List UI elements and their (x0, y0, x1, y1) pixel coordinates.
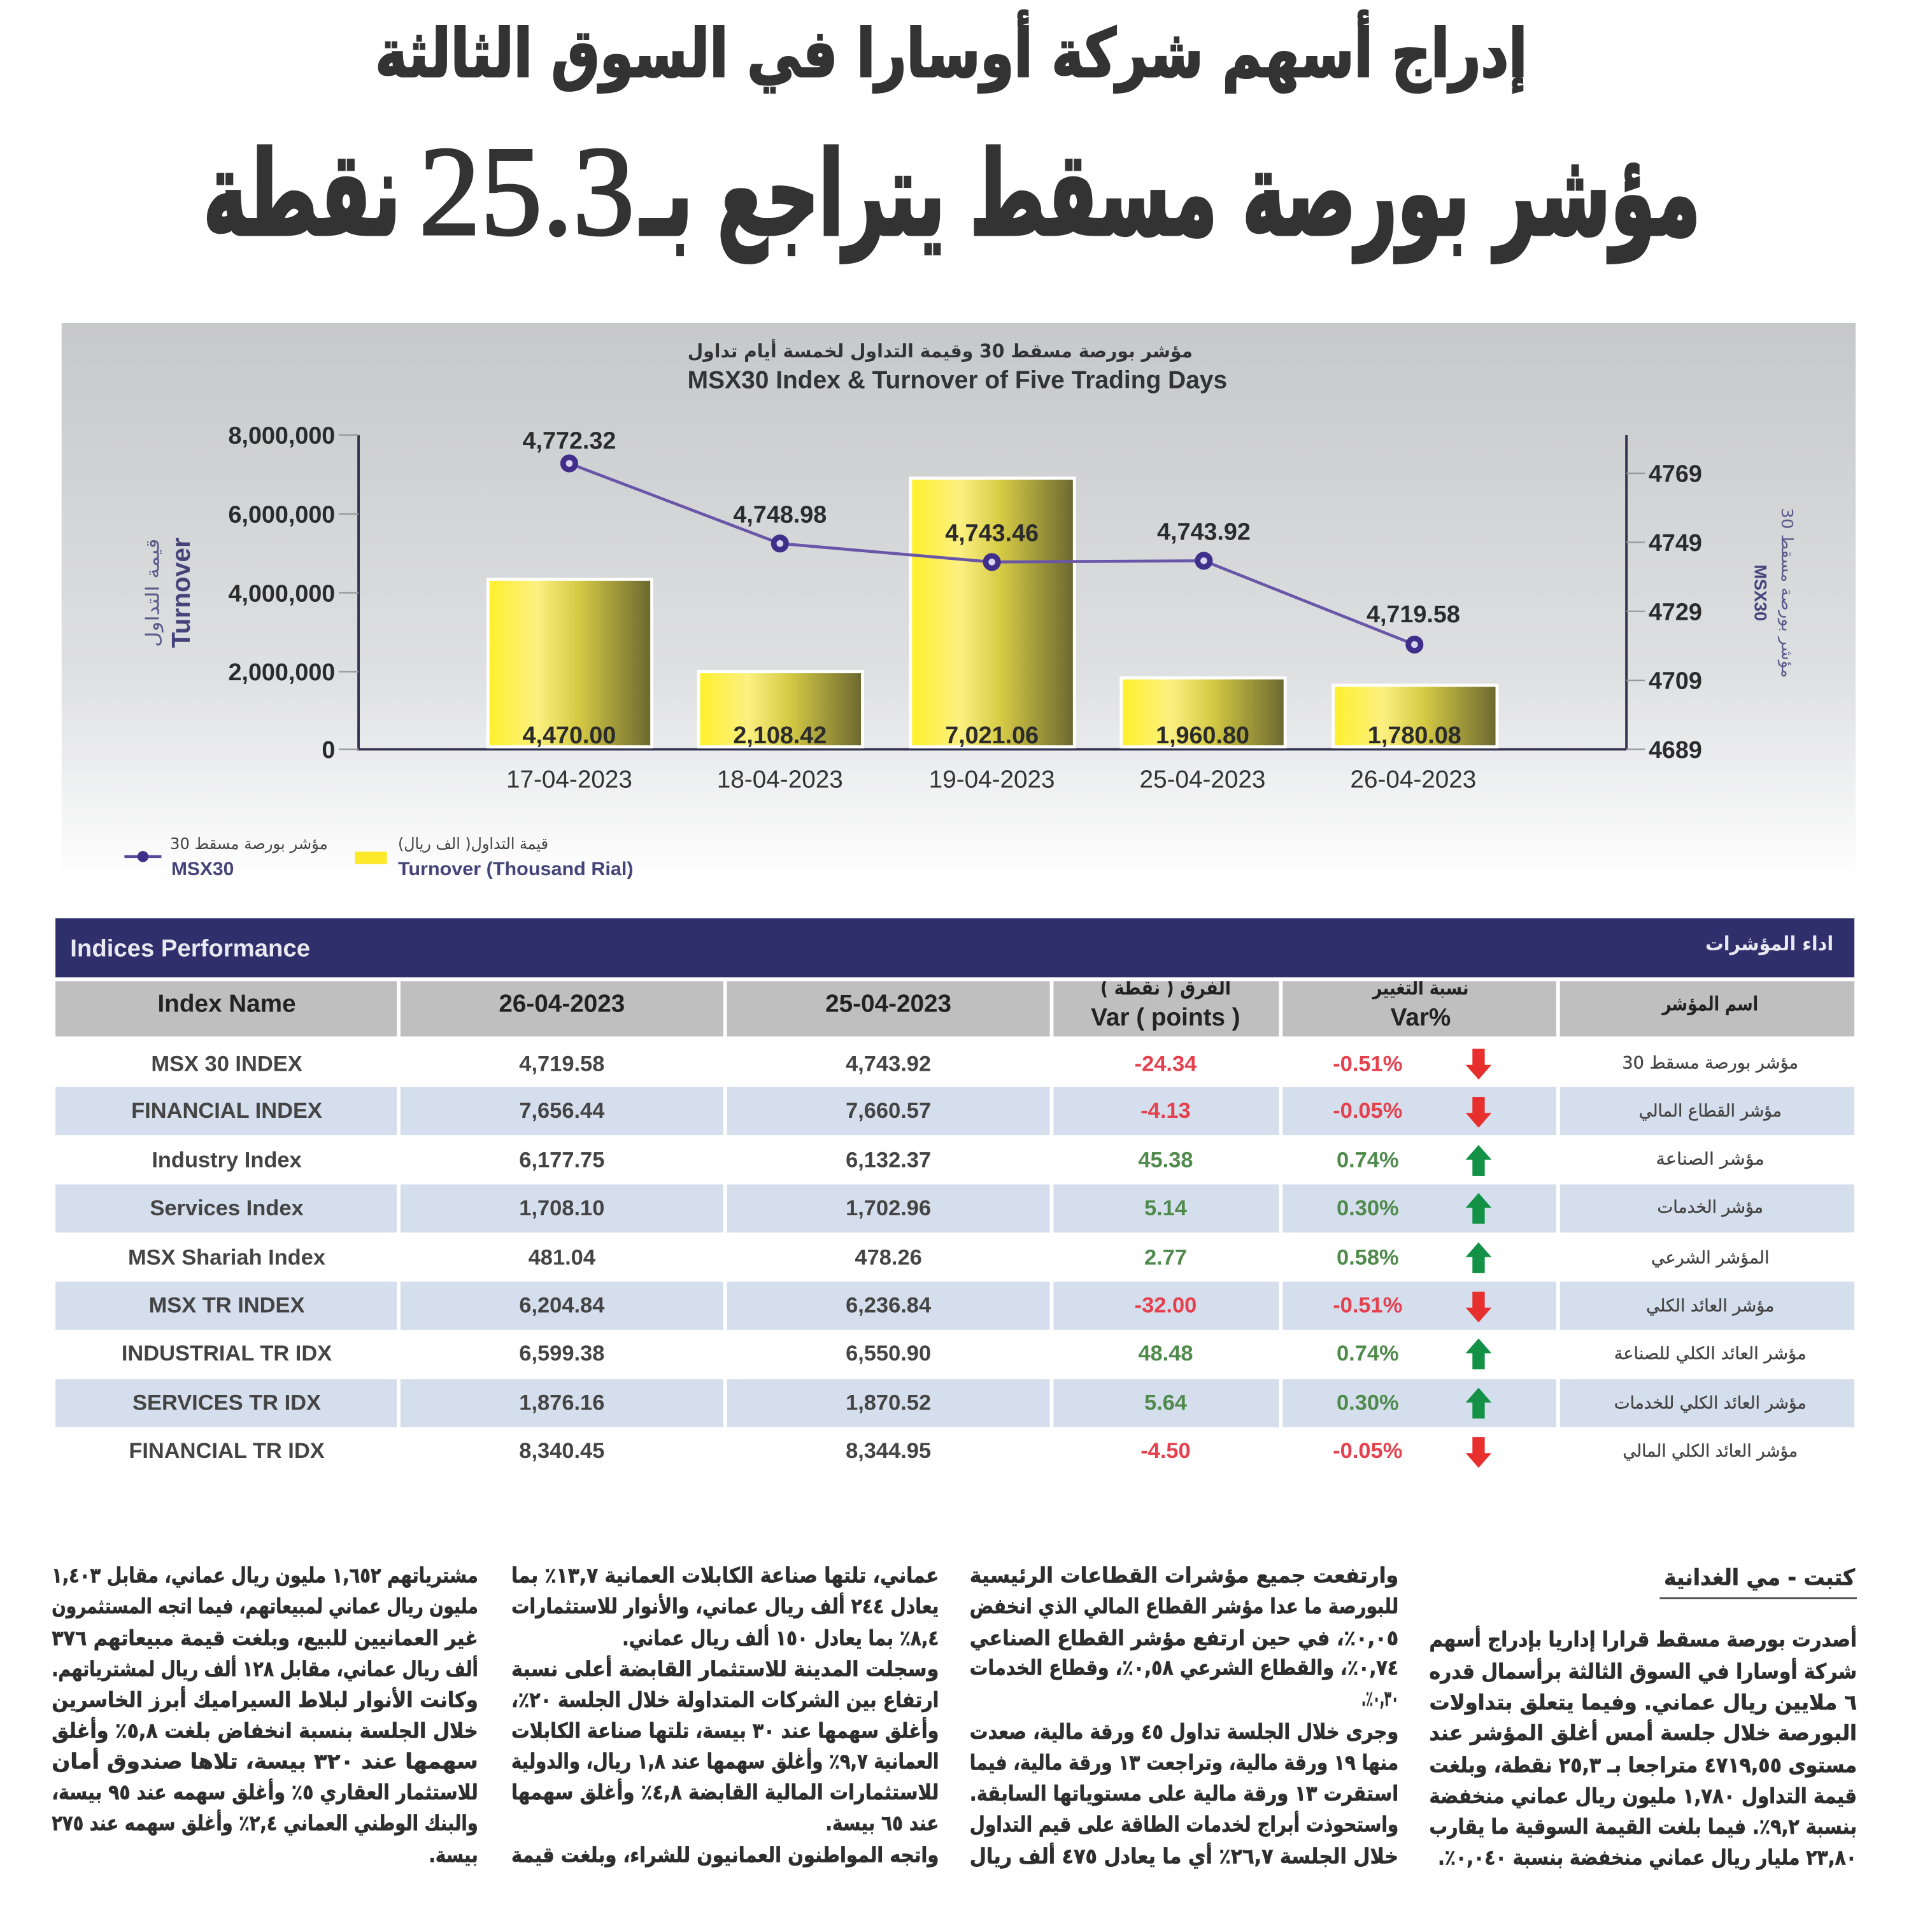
row: FINANCIAL TR IDX (129, 1437, 1798, 1468)
x axis dates: 19-04-2023 (929, 766, 1055, 793)
right axis: MSX30: 4749 (1649, 529, 1702, 556)
row: INDUSTRIAL TR IDX: 48.48 (1138, 1341, 1193, 1366)
chart title: مؤشر بورصة مسقط 30 وقيمة التداول لخمسة أيام تداول (688, 339, 1193, 362)
row: FINANCIAL INDEX: FINANCIAL INDEX (131, 1099, 322, 1123)
row: FINANCIAL TR IDX: مؤشر العائد الكلي المالي (1623, 1441, 1798, 1461)
text column 1 (right): ٦ ملايين ريال عماني. وفيما يتعلق بتداولات (1430, 1690, 1857, 1715)
table header row: الفرق ( نقطة ) (1100, 977, 1231, 1000)
row: SERVICES TR IDX: 5.64 (1144, 1391, 1187, 1415)
axis title: MSX30: مؤشر بورصة مسقط 30 (1777, 508, 1796, 678)
title: Osara listing headline: إدراج أسهم شركة أوسارا في السوق الثالثة (375, 10, 1527, 93)
row: Services Index: 5.14 (1144, 1196, 1187, 1220)
row: SERVICES TR IDX: 1,876.16 (519, 1391, 604, 1415)
row: Services Index: 1,702.96 (846, 1196, 931, 1220)
right axis: MSX30: 4729 (1649, 598, 1702, 625)
row: Services Index: 1,708.10 (519, 1196, 604, 1220)
row: SERVICES TR IDX: 0.30% (1337, 1391, 1399, 1415)
row: MSX Shariah Index: 2.77 (1144, 1245, 1187, 1269)
row: MSX TR INDEX: -0.51% (1333, 1294, 1402, 1318)
text column 3: عماني، تلتها صناعة الكابلات العمانية ١٣,٧٪ بما (511, 1562, 939, 1588)
row: Services Index: 0.30% (1337, 1196, 1399, 1220)
row: INDUSTRIAL TR IDX: 0.74% (1337, 1341, 1399, 1366)
row: SERVICES TR IDX: 1,870.52 (846, 1391, 931, 1415)
row: Industry Index (152, 1145, 1765, 1176)
row: FINANCIAL TR IDX: 8,340.45 (519, 1439, 604, 1463)
text column 2 (970, 1562, 1398, 1869)
line series: MSX30 (563, 457, 1421, 651)
row: INDUSTRIAL TR IDX: مؤشر العائد الكلي للصناعة (1614, 1344, 1807, 1364)
text column 2: وارتفعت جميع مؤشرات القطاعات الرئيسية (970, 1562, 1398, 1588)
row: SERVICES TR IDX (132, 1388, 1807, 1418)
byline: كتبت - مي الغدانية (1664, 1565, 1856, 1590)
row: INDUSTRIAL TR IDX: 6,550.90 (846, 1341, 931, 1366)
row: MSX Shariah Index: 478.26 (855, 1245, 922, 1269)
legend: MSX30: MSX30 (171, 859, 234, 880)
left axis: turnover: 0 (322, 736, 335, 763)
text column 3: العمانية ٩,٧٪ وأغلق سهمها عند ١,٨ ريال، والدولية (511, 1748, 939, 1775)
row: INDUSTRIAL TR IDX (122, 1338, 1807, 1369)
table header row: Var% (1391, 1004, 1451, 1031)
row: MSX TR INDEX (149, 1292, 1774, 1322)
line values: 4,719.58 (1367, 601, 1460, 627)
bars: turnover (488, 478, 1497, 747)
text column 4 (left) (52, 1562, 478, 1868)
alternating row stripes (55, 1087, 1854, 1427)
row: Services Index: Services Index (150, 1196, 304, 1220)
row: FINANCIAL INDEX: مؤشر القطاع المالي (1638, 1101, 1782, 1121)
legend: MSX30: مؤشر بورصة مسقط 30 (170, 834, 328, 853)
text column 3: للاستثمارات المالية القابضة ٤,٨٪ وأغلق سهمها (511, 1778, 939, 1805)
axis title: turnover: قيمة التداول (142, 539, 164, 647)
text column 4 (left): وكانت الأنوار لبلاط السيراميك أبرز الخاسرين (52, 1686, 478, 1713)
left axis: turnover: 6,000,000 (228, 501, 335, 527)
text column 3: عند ٦٥ بيسة. (825, 1810, 939, 1835)
bar values: 1,960.80 (1156, 722, 1249, 748)
table header row: اسم المؤشر (1661, 993, 1758, 1016)
row: Industry Index: 45.38 (1138, 1148, 1193, 1172)
text column 2: وجرى خلال الجلسة تداول ٤٥ ورقة مالية، صعدت (970, 1719, 1398, 1745)
row: FINANCIAL TR IDX: 8,344.95 (846, 1439, 931, 1463)
row: MSX Shariah Index: 481.04 (529, 1245, 595, 1269)
left axis: turnover: 8,000,000 (228, 422, 335, 449)
row: SERVICES TR IDX: SERVICES TR IDX (132, 1391, 321, 1415)
text column 1 (right): بنسبة ٩,٢٪. فيما بلغت القيمة السوقية ما يقارب (1430, 1814, 1857, 1839)
row: FINANCIAL TR IDX: -0.05% (1333, 1439, 1402, 1463)
row: FINANCIAL TR IDX: -4.50 (1140, 1439, 1191, 1463)
text column 2: للبورصة ما عدا مؤشر القطاع المالي الذي انخفض (970, 1594, 1398, 1619)
row: MSX TR INDEX: مؤشر العائد الكلي (1646, 1296, 1774, 1316)
text column 1 (right) (1430, 1625, 1857, 1870)
row: MSX TR INDEX: MSX TR INDEX (149, 1294, 305, 1318)
legend: turnover: Turnover (Thousand Rial) (398, 859, 634, 880)
text column 3: وسجلت المدينة للاستثمار القابضة أعلى نسبة (511, 1655, 939, 1682)
text column 2: ٠,٧٤٪، والقطاع الشرعي ٠,٥٨٪، وقطاع الخدمات (970, 1655, 1398, 1681)
legend: MSX30 (124, 834, 328, 880)
row: Industry Index: 0.74% (1337, 1148, 1399, 1172)
text column 1 (right): قيمة التداول ١,٧٨٠ مليون ريال عماني منخفضة (1430, 1783, 1857, 1809)
row: Services Index: مؤشر الخدمات (1658, 1197, 1763, 1217)
row: INDUSTRIAL TR IDX: INDUSTRIAL TR IDX (122, 1341, 332, 1366)
row: MSX 30 INDEX: 4,743.92 (846, 1052, 931, 1076)
table header row (55, 977, 1854, 1036)
text column 2: منها ١٩ ورقة مالية، وتراجعت ١٣ ورقة مالية، فيما (970, 1750, 1398, 1776)
table header row: Var ( points ) (1091, 1004, 1240, 1031)
legend: turnover (355, 834, 634, 880)
x axis dates: 18-04-2023 (717, 766, 843, 793)
text column 2: واستحوذت أبراج لخدمات الطاقة على قيم التداول (970, 1810, 1398, 1837)
left axis: turnover: 4,000,000 (228, 580, 335, 606)
row: MSX Shariah Index (128, 1242, 1770, 1273)
row: INDUSTRIAL TR IDX: 6,599.38 (519, 1341, 604, 1366)
table title band: Indices Performance (70, 935, 310, 962)
row: Industry Index: 6,132.37 (846, 1148, 931, 1172)
bar values (523, 722, 1461, 748)
bar values: 4,470.00 (523, 722, 616, 748)
row: MSX Shariah Index: MSX Shariah Index (128, 1245, 325, 1269)
title: main headline (203, 120, 1700, 263)
text column 2: ٠,٠٥٪، في حين ارتفع مؤشر القطاع الصناعي (970, 1625, 1398, 1651)
text column 4 (left): والبنك الوطني العماني ٢,٤٪ وأغلق سهمه عند ٢٧٥ (52, 1809, 478, 1836)
right axis: MSX30: 4689 (1649, 736, 1702, 763)
row: FINANCIAL INDEX: -4.13 (1140, 1099, 1191, 1123)
axis title: MSX30 (1751, 508, 1796, 678)
text column 2: استقرت ١٣ ورقة مالية على مستوياتها السابقة. (970, 1781, 1398, 1806)
table header row: 25-04-2023 (825, 990, 951, 1018)
row: FINANCIAL INDEX: 7,660.57 (846, 1099, 931, 1123)
text column 4 (left): ألف ريال عماني، مقابل ١٢٨ ألف ريال لمشترياتهم. (52, 1655, 478, 1682)
row: MSX 30 INDEX: MSX 30 INDEX (151, 1052, 302, 1076)
axis title: MSX30: MSX30 (1751, 564, 1770, 621)
text column 4 (left): سهمها عند ٣٢٠ بيسة، تلاها صندوق أمان (52, 1748, 478, 1775)
row: FINANCIAL INDEX: -0.05% (1333, 1099, 1402, 1123)
text column 2: خلال الجلسة ٢٦,٧٪ أي ما يعادل ٤٧٥ ألف ريال (970, 1843, 1398, 1869)
text column 1 (right): شركة أوسارا في السوق الثالثة برأسمال قدره (1430, 1657, 1857, 1684)
text column 3: واتجه المواطنون العمانيون للشراء، وبلغت قيمة (511, 1843, 939, 1868)
text column 3: ٨,٤٪ بما يعادل ١٥٠ ألف ريال عماني. (622, 1624, 939, 1650)
row: MSX TR INDEX: 6,204.84 (519, 1294, 604, 1318)
text column 3: وأغلق سهمها عند ٣٠ بيسة، تلتها صناعة الكابلات (511, 1717, 939, 1743)
row: SERVICES TR IDX: مؤشر العائد الكلي للخدمات (1614, 1394, 1807, 1413)
legend: turnover: قيمة التداول( الف ريال) (398, 834, 548, 853)
table title band: اداء المؤشرات (1705, 932, 1833, 955)
row: Industry Index: مؤشر الصناعة (1656, 1150, 1765, 1169)
axis title: turnover: Turnover (166, 538, 195, 648)
line values: 4,743.92 (1157, 518, 1251, 545)
row: FINANCIAL INDEX (131, 1097, 1782, 1127)
text column 3: ارتفاع بين الشركات المتداولة خلال الجلسة ٢٠٪، (511, 1687, 939, 1713)
right axis: MSX30: 4769 (1649, 461, 1702, 487)
row: FINANCIAL INDEX: 7,656.44 (519, 1099, 604, 1123)
x axis dates: 26-04-2023 (1350, 766, 1476, 793)
row: MSX 30 INDEX: -0.51% (1333, 1052, 1402, 1076)
x axis dates: 25-04-2023 (1140, 766, 1265, 793)
text column 1 (right): مستوى ٤٧١٩,٥٥ متراجعا بـ ٢٥,٣ نقطة، وبلغت (1430, 1752, 1857, 1778)
chart title (688, 339, 1227, 394)
text column 4 (left): مليون ريال عماني لمبيعاتهم، فيما اتجه المستثمرون (52, 1594, 478, 1619)
x axis dates (506, 766, 1476, 793)
text column 4 (left): للاستثمار العقاري ٥٪ وأغلق سهمه عند ٩٥ بيسة، (52, 1778, 478, 1805)
row: Services Index (150, 1193, 1763, 1224)
row: MSX Shariah Index: المؤشر الشرعي (1651, 1248, 1770, 1268)
text column 4 (left): مشترياتهم ١,٦٥٢ مليون ريال عماني، مقابل ١,٤٠٣ (52, 1562, 478, 1588)
text column 4 (left): خلال الجلسة بنسبة انخفاض بلغت ٥,٨٪ وأغلق (52, 1717, 478, 1743)
title: main headline: 25.3 (419, 120, 634, 262)
table header row: نسبة التغيير (1372, 977, 1468, 1000)
text column 4 (left): بيسة. (429, 1843, 478, 1868)
row: MSX TR INDEX: -32.00 (1135, 1294, 1197, 1318)
text column 3: يعادل ٢٤٤ ألف ريال عماني، والأنوار للاستثمارات (511, 1592, 939, 1619)
text column 1 (right): ٢٣,٨٠ مليار ريال عماني منخفضة بنسبة ٠,٠٤٠٪. (1438, 1845, 1857, 1870)
right axis: MSX30 (1626, 435, 1702, 763)
row: MSX 30 INDEX: -24.34 (1135, 1052, 1197, 1076)
table title band (55, 918, 1854, 981)
line values (523, 427, 1460, 627)
row: MSX Shariah Index: 0.58% (1337, 1245, 1399, 1269)
bar values: 2,108.42 (733, 722, 827, 748)
title: main headline: نقطة (203, 127, 401, 262)
line values: 4,748.98 (733, 501, 827, 527)
bar values: 1,780.08 (1368, 722, 1461, 748)
left axis: turnover: 2,000,000 (228, 659, 335, 685)
right axis: MSX30: 4709 (1649, 668, 1702, 694)
line values: 4,743.46 (945, 519, 1039, 546)
bar values: 7,021.06 (945, 722, 1039, 748)
axis title: turnover (142, 538, 195, 648)
text column 2: ٠,٣٠٪. (1361, 1686, 1398, 1711)
row: MSX 30 INDEX: 4,719.58 (519, 1052, 604, 1076)
chart title: MSX30 Index & Turnover of Five Trading Days (688, 367, 1227, 394)
row: Industry Index: 6,177.75 (519, 1148, 604, 1172)
table header row: Index Name (157, 990, 296, 1018)
line values: 4,772.32 (523, 427, 616, 454)
row: MSX 30 INDEX: مؤشر بورصة مسقط 30 (1622, 1053, 1798, 1073)
row: MSX 30 INDEX (151, 1049, 1798, 1080)
text column 1 (right): البورصة خلال جلسة أمس أغلق المؤشر عند (1430, 1719, 1857, 1746)
row: Industry Index: Industry Index (152, 1148, 302, 1172)
left axis: turnover (228, 422, 1626, 763)
text column 3 (511, 1562, 939, 1868)
x axis dates: 17-04-2023 (506, 766, 632, 793)
row: FINANCIAL TR IDX: FINANCIAL TR IDX (129, 1439, 325, 1463)
panel: indices performance table (55, 918, 1854, 1468)
row: MSX TR INDEX: 6,236.84 (846, 1294, 931, 1318)
text column 4 (left): غير العمانيين للبيع، وبلغت قيمة مبيعاتهم ٣٧٦ (52, 1625, 478, 1651)
text column 1 (right): أصدرت بورصة مسقط قرارا إداريا بإدراج أسهم (1430, 1625, 1857, 1652)
table header row: 26-04-2023 (499, 990, 625, 1018)
panel: MSX30 chart (62, 323, 1856, 912)
